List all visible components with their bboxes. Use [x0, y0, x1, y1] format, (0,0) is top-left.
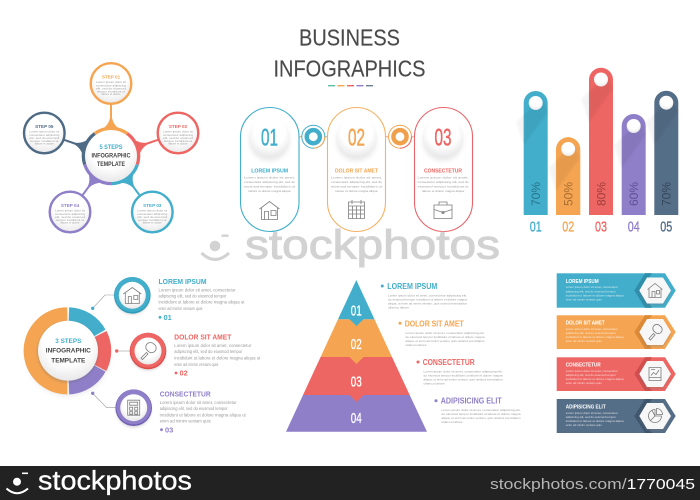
banner 03: adipiscing elit, sed do eiusmod tempor	[566, 373, 616, 377]
footer bar: stockphotos	[38, 465, 192, 495]
banner 01: LOREM IPSUM	[566, 279, 599, 285]
text: lorem ipsum: 01	[164, 313, 172, 322]
donut center label: 3 STEPS	[55, 338, 82, 345]
step 04 circle: Lorem ipsum dolor sit	[55, 208, 85, 212]
banner 03	[557, 357, 676, 391]
pyramid text 02: Lorem ipsum dolor sit amet, consectetur adipiscing elit,	[406, 331, 485, 335]
bar 05	[646, 91, 678, 236]
step 02 circle: tempor incididunt ut	[164, 139, 192, 143]
bar 02	[548, 137, 580, 236]
bar 03: 80%	[594, 182, 608, 206]
bar 05: 70%	[660, 182, 674, 206]
text: consectetur	[160, 390, 247, 434]
pyramid text 03: CONSECTETUR	[423, 358, 475, 367]
banner 01: incididunt ut labore et dolore magna aliqua	[566, 293, 624, 297]
pyramid text 04: Lorem ipsum dolor sit amet, consectetur adipiscing elit,	[442, 408, 521, 412]
pyramid numbers: 02	[351, 336, 362, 353]
banner 03: incididunt ut labore et dolore magna aliqua	[566, 377, 624, 381]
pill 02: labore et dolore magna aliqua	[336, 189, 378, 193]
pill 01: eiusmod tempor incididunt ut	[244, 185, 295, 189]
pill 01: Lorem ipsum dolor sit amet,	[244, 176, 295, 180]
step 02 circle: labore et dolore	[168, 142, 188, 146]
banner 01	[557, 273, 676, 308]
pill 02	[328, 108, 386, 232]
pill 02: DOLOR SIT AMET	[335, 169, 379, 175]
pyramid text 04: aliqua, ut enim ad minim veniam, quis nostrud exercitation	[442, 416, 521, 420]
pyramid text 01: Lorem ipsum dolor sit amet, consectetur adipiscing elit,	[388, 294, 467, 298]
text: lorem ipsum: Lorem ipsum dolor sit amet, consectetur	[158, 288, 236, 292]
step 04 circle: elit, sed do eiusmod	[55, 215, 85, 219]
step 04 circle	[50, 192, 90, 232]
icon: magnifier	[649, 324, 662, 340]
panel: three pill timeline	[240, 108, 472, 232]
pyramid text 01: aliqua, ut enim ad minim veniam, quis nostrud exercitation	[388, 302, 467, 306]
blue icon circle	[114, 277, 151, 315]
bar 03	[581, 68, 613, 236]
center label: INFOGRAPHIC	[92, 154, 131, 160]
icon: house	[123, 288, 141, 304]
pyramid text 04	[434, 397, 521, 424]
panel: five step circle diagram	[24, 63, 198, 232]
text: lorem ipsum: adipiscing elit, sed do eiusmod tempor	[158, 294, 227, 298]
text: dolor sit amet	[174, 332, 261, 378]
pyramid text 04: ADIPISICING ELIT	[441, 397, 502, 406]
panel: hexagon banners	[557, 273, 676, 433]
footer bar: stockphotos.com/ 1770045	[490, 477, 695, 493]
pill 01	[240, 108, 299, 232]
title: BUSINESS	[299, 25, 400, 51]
pyramid text 03: do eiusmod tempor incididunt ut labore et dolore magna	[424, 374, 503, 378]
banner 01: enim ad minim veniam quis	[566, 297, 602, 301]
icon: calculator	[128, 400, 140, 415]
step 01 circle: STEP 01	[102, 74, 121, 80]
donut center label: INFOGRAPHIC	[46, 348, 91, 355]
bar 04: 60%	[627, 182, 641, 206]
text: consectetur: 03	[165, 425, 173, 434]
pill 02: consectetur adipiscing elit, sed do	[331, 180, 382, 184]
bar 01: 01	[530, 218, 542, 236]
step 03 circle: STEP 03	[143, 203, 162, 208]
watermark: stockphotos	[245, 222, 500, 268]
banner 04: adipiscing elit, sed do eiusmod tempor	[566, 415, 616, 419]
pill 03: 03	[434, 124, 452, 152]
pill 01: 01	[261, 124, 278, 152]
pill 03: consectetur adipiscing elit, sed do	[418, 180, 469, 184]
text: dolor sit amet: Lorem ipsum dolor sit amet, consectetur	[174, 343, 252, 348]
banner 01: adipiscing elit, sed do eiusmod tempor	[566, 289, 616, 293]
pyramid numbers: 04	[351, 410, 362, 427]
pyramid text 04: ullamco labore	[442, 420, 463, 424]
step 02 circle: STEP 02	[169, 124, 188, 129]
banner 02: enim ad minim veniam quis	[566, 339, 602, 343]
panel: bar chart	[516, 68, 678, 236]
bar 02: 02	[562, 218, 574, 236]
step 01 circle: consectetur adipiscing	[96, 83, 126, 87]
donut center label: TEMPLATE	[51, 357, 86, 364]
step 05 circle: elit, sed do eiusmod	[29, 136, 60, 140]
text: lorem ipsum: LOREM IPSUM	[158, 277, 206, 286]
pill 03: CONSECTETUR	[424, 169, 462, 175]
text: consectetur: adipiscing elit, sed do eiusmod tempor	[160, 406, 228, 411]
pill 03	[414, 108, 472, 232]
step 05 circle: Lorem ipsum dolor sit	[29, 130, 59, 134]
pyramid text 01: do eiusmod tempor incididunt ut labore et dolore magna	[388, 298, 467, 302]
pyramid text 02	[398, 319, 485, 347]
icon: house	[648, 284, 662, 298]
step 01 circle: labore et dolore	[102, 92, 121, 96]
step 05 circle: labore et dolore	[35, 142, 54, 146]
step 03 circle: labore et dolore	[143, 221, 162, 225]
bar 05: 05	[660, 218, 672, 236]
step 02 circle: elit, sed do eiusmod	[163, 136, 193, 140]
text: consectetur: enim ad minim veniam quis	[160, 418, 211, 424]
pill 01: labore et dolore magna aliqua	[248, 189, 291, 193]
panel: pyramid	[286, 280, 521, 432]
bar 04: 04	[628, 218, 640, 236]
banner 02	[557, 315, 676, 349]
icon: briefcase	[434, 202, 452, 218]
pyramid numbers: 01	[351, 302, 362, 320]
text: lorem ipsum	[158, 277, 245, 322]
connector: blue ring	[299, 125, 327, 148]
step 02 circle: Lorem ipsum dolor sit	[163, 130, 193, 134]
banner 02: adipiscing elit, sed do eiusmod tempor	[566, 331, 616, 335]
text: dolor sit amet: adipiscing elit, sed do eiusmod tempor	[174, 349, 243, 354]
pyramid text 01: ullamco labore	[388, 306, 409, 310]
banner 03: Lorem ipsum dolor sit amet, consectetur	[566, 369, 618, 373]
banner 02: incididunt ut labore et dolore magna aliqua	[566, 335, 624, 339]
pyramid text 02: aliqua, ut enim ad minim veniam, quis nostrud exercitation	[406, 339, 485, 343]
pyramid text 03	[416, 358, 503, 386]
text: lorem ipsum: enim ad minim veniam quis	[158, 306, 202, 311]
pill 01: LOREM IPSUM	[251, 169, 289, 175]
step 05 circle: STEP 05	[35, 124, 54, 129]
text: consectetur: incididunt ut labore et dolore magna aliqua ut	[160, 412, 247, 417]
text: dolor sit amet: 02	[180, 369, 188, 378]
step 02 circle: consectetur adipiscing	[163, 133, 193, 137]
step 02 circle	[158, 113, 198, 153]
icon: magnifier	[141, 342, 156, 360]
icon: calendar	[348, 200, 364, 218]
pill 02: Lorem ipsum dolor sit amet,	[331, 176, 382, 180]
banner 04	[557, 399, 676, 433]
step 03 circle: Lorem ipsum dolor sit	[137, 208, 167, 212]
text: dolor sit amet: incididunt ut labore et dolore magna aliqua ut	[174, 356, 261, 360]
center label: 5 STEPS	[100, 145, 122, 151]
pill 03: Lorem ipsum dolor sit amet,	[418, 176, 469, 180]
step 04 circle: labore et dolore	[60, 221, 80, 225]
banner 02: DOLOR SIT AMET	[566, 320, 605, 326]
pyramid text 03: aliqua, ut enim ad minim veniam, quis nostrud exercitation	[424, 378, 503, 382]
step 05 circle: consectetur adipiscing	[29, 133, 60, 137]
title	[274, 25, 426, 86]
step 04 circle: consectetur adipiscing	[55, 212, 85, 216]
banner 04: ADIPISICING ELIT	[566, 404, 606, 410]
pill 03: labore et dolore magna aliqua	[422, 189, 464, 193]
step 03 circle: tempor incididunt ut	[138, 218, 166, 222]
text: lorem ipsum: incididunt ut labore et dolore magna aliqua ut	[158, 300, 245, 305]
leader lines	[91, 295, 131, 408]
banner 01: Lorem ipsum dolor sit amet, consectetur	[566, 285, 618, 289]
title: INFOGRAPHICS	[274, 56, 426, 82]
pyramid text 04: do eiusmod tempor incididunt ut labore et dolore magna	[442, 412, 521, 416]
pyramid text 03: ullamco labore	[424, 382, 445, 386]
icon: pie chart	[648, 408, 662, 422]
text: dolor sit amet: DOLOR SIT AMET	[174, 332, 232, 342]
banner 04: Lorem ipsum dolor sit amet, consectetur	[566, 411, 618, 415]
red icon circle	[130, 333, 166, 371]
footer bar	[0, 465, 700, 500]
icon: chart board	[649, 368, 661, 380]
pyramid text 02: do eiusmod tempor incididunt ut labore et dolore magna	[406, 335, 485, 339]
step 05 circle: tempor incididunt ut	[30, 139, 58, 143]
bar 02: 50%	[562, 182, 576, 206]
pyramid text 02: ullamco labore	[406, 343, 427, 347]
pill 03: eiusmod tempor incididunt ut	[418, 185, 469, 189]
bar 04	[614, 114, 646, 236]
pyramid text 03: Lorem ipsum dolor sit amet, consectetur adipiscing elit,	[424, 370, 503, 374]
bar 01: 70%	[529, 182, 543, 206]
pyramid text 01	[381, 282, 467, 310]
text: dolor sit amet: enim ad minim veniam quis	[174, 362, 218, 367]
pyramid text 01: LOREM IPSUM	[387, 282, 438, 291]
icon: house	[260, 202, 280, 220]
step 03 circle: consectetur adipiscing	[137, 212, 168, 216]
purple icon circle	[115, 389, 152, 428]
text: consectetur: Lorem ipsum dolor sit amet, consectetur	[160, 400, 237, 405]
pyramid numbers	[351, 302, 362, 427]
text: consectetur: CONSECTETUR	[160, 390, 211, 398]
banner 03: enim ad minim veniam quis	[566, 381, 602, 385]
center label: TEMPLATE	[97, 162, 125, 168]
donut center label	[46, 338, 91, 364]
step 01 circle: Lorem ipsum dolor sit	[96, 80, 126, 84]
pyramid layers	[286, 280, 427, 432]
donut chart	[24, 307, 111, 396]
step 03 circle: elit, sed do eiusmod	[137, 215, 168, 219]
bar 03: 03	[595, 218, 607, 236]
step 05 circle	[24, 113, 65, 153]
banner 02: Lorem ipsum dolor sit amet, consectetur	[566, 327, 618, 331]
banner 04: incididunt ut labore et dolore magna aliqua	[566, 419, 624, 423]
step 01 circle: tempor incididunt ut	[97, 89, 125, 93]
banner 04: enim ad minim veniam quis	[566, 423, 602, 427]
step 03 circle	[132, 192, 173, 232]
step 04 circle: STEP 04	[61, 203, 80, 208]
step 01 circle	[91, 63, 131, 104]
center label	[85, 130, 137, 182]
bar 01	[516, 91, 548, 236]
step 01 circle: elit, sed do eiusmod	[96, 87, 126, 91]
banner 03: CONSECTETUR	[566, 362, 601, 368]
pill 01: consectetur adipiscing elit, sed do	[244, 180, 295, 184]
pyramid numbers: 03	[351, 374, 362, 390]
panel: three step donut	[24, 277, 261, 434]
connector: orange ring	[386, 125, 414, 148]
pill 02: 02	[348, 124, 365, 152]
pill 02: eiusmod tempor incididunt ut	[331, 185, 382, 189]
central ring segments and stems	[57, 104, 165, 207]
pyramid text 02: DOLOR SIT AMET	[405, 319, 464, 328]
step 04 circle: tempor incididunt ut	[56, 218, 84, 222]
